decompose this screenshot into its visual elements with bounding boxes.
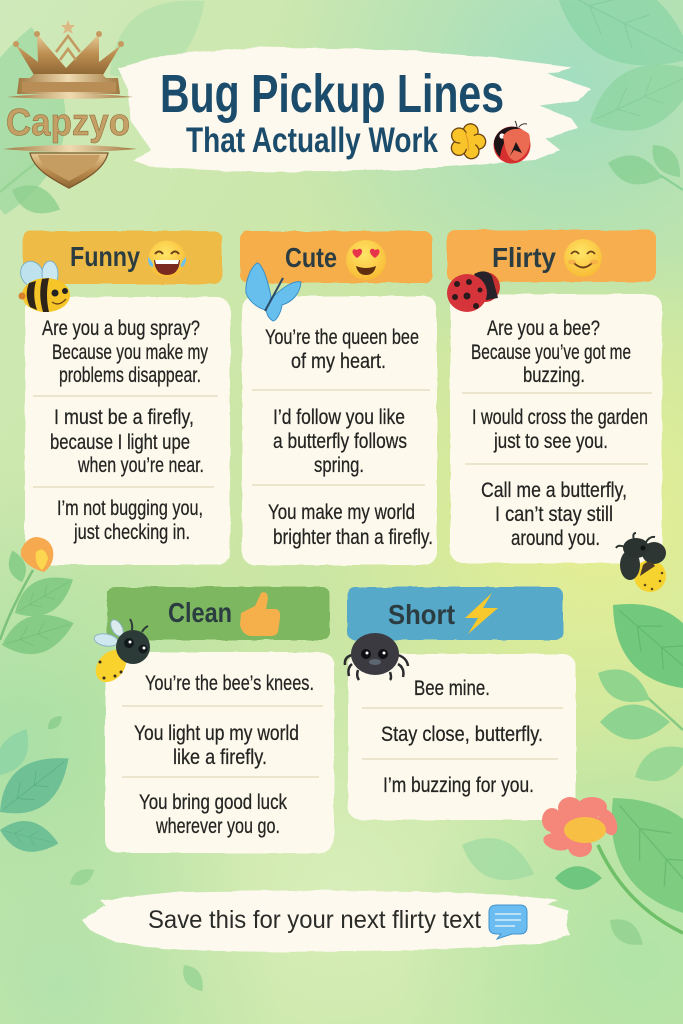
Cute header (240, 231, 432, 283)
Funny lines: Are you a bug spray? (42, 317, 200, 340)
Cute card (242, 296, 437, 565)
title: Bug Pickup Lines (160, 64, 504, 124)
Short card (348, 654, 576, 820)
Funny lines (33, 317, 218, 544)
crown (16, 34, 121, 75)
shield plate (3, 145, 137, 152)
icon: laughing emoji (148, 240, 186, 278)
panel: Cute (240, 231, 437, 565)
Clean heading: Clean (168, 597, 232, 628)
icon: speech bubble (489, 905, 527, 939)
icon: heart eyes emoji (346, 240, 386, 280)
Clean lines: You’re the bee’s knees. (145, 672, 314, 695)
footer brush banner (82, 890, 570, 952)
Funny lines: I’m not bugging you, (57, 497, 203, 520)
Flirty card (450, 294, 662, 563)
icon: thumbs up (240, 592, 280, 636)
Flirty lines: Because you’ve got me (471, 341, 631, 364)
Flirty lines: Are you a bee? (487, 317, 600, 340)
Flirty lines: buzzing. (523, 364, 585, 387)
Short heading: Short (388, 599, 455, 630)
Clean lines: wherever you go. (155, 815, 280, 838)
Funny lines: because I light upe (50, 431, 190, 454)
footer text: Save this for your next flirty text (148, 906, 481, 934)
Funny card (25, 297, 230, 565)
Cute lines (252, 326, 433, 549)
Flirty lines: Call me a butterfly, (481, 479, 627, 502)
icon: yellow flower (447, 120, 489, 161)
icon: orange tulip (21, 537, 53, 572)
icon: title ladybug (494, 121, 530, 164)
Funny lines: when you’re near. (77, 454, 204, 477)
Clean lines: You light up my world (134, 722, 299, 745)
Flirty lines: around you. (511, 527, 600, 550)
icon: lightning bolt (465, 593, 498, 634)
Flirty header (447, 230, 656, 282)
Cute lines: I’d follow you like (273, 406, 405, 429)
Funny lines: problems disappear. (59, 364, 201, 387)
Clean lines (122, 672, 323, 838)
icon: spider (345, 633, 408, 680)
Funny heading: Funny (70, 241, 140, 272)
panel: Clean (89, 587, 334, 853)
panel: Flirty (447, 230, 666, 592)
Flirty lines: I can’t stay still (495, 503, 613, 526)
Cute lines: You’re the queen bee (265, 326, 419, 349)
Short lines: I’m buzzing for you. (383, 774, 534, 797)
Flirty lines (462, 317, 652, 550)
icon: firefly, left (89, 618, 150, 688)
icon: bee (17, 258, 70, 312)
background leaves and stem, left (0, 548, 209, 996)
Cute lines: You make my world (268, 501, 415, 524)
Short lines (362, 677, 563, 797)
Cute lines: brighter than a firefly. (273, 526, 433, 549)
logo: Capzyo crown and shield (3, 20, 137, 188)
Cute lines: spring. (314, 454, 364, 477)
Cute lines: a butterfly follows (273, 430, 407, 453)
icon: ladybug (447, 271, 500, 312)
icon: butterfly (246, 263, 301, 321)
title (160, 64, 504, 160)
Flirty lines: just to see you. (493, 430, 608, 453)
Flirty heading: Flirty (492, 242, 556, 273)
background leaves, right (455, 581, 683, 953)
Short lines: Stay close, butterfly. (381, 723, 543, 746)
Clean lines: You bring good luck (139, 791, 287, 814)
Short header (347, 587, 563, 640)
wordmark: Capzyo (6, 102, 130, 144)
icon: smiling emoji (564, 239, 602, 277)
background leaves, top (0, 0, 683, 222)
Clean card (105, 652, 334, 853)
Funny lines: Because you make my (52, 341, 208, 364)
band (17, 74, 120, 94)
Funny lines: just checking in. (73, 521, 190, 544)
Cute heading: Cute (285, 242, 337, 273)
Funny header (23, 231, 222, 284)
icon: coral flower (541, 797, 621, 857)
icon: firefly, right (616, 533, 666, 592)
title brush banner (118, 47, 590, 172)
panel: Funny (17, 231, 230, 565)
Cute lines: of my heart. (291, 350, 386, 373)
Clean header (107, 587, 330, 640)
panel: Short (345, 587, 576, 820)
title: That Actually Work (186, 121, 438, 160)
Clean lines: like a firefly. (173, 746, 267, 769)
Short lines: Bee mine. (414, 677, 490, 700)
Funny lines: I must be a firefly, (54, 406, 194, 429)
